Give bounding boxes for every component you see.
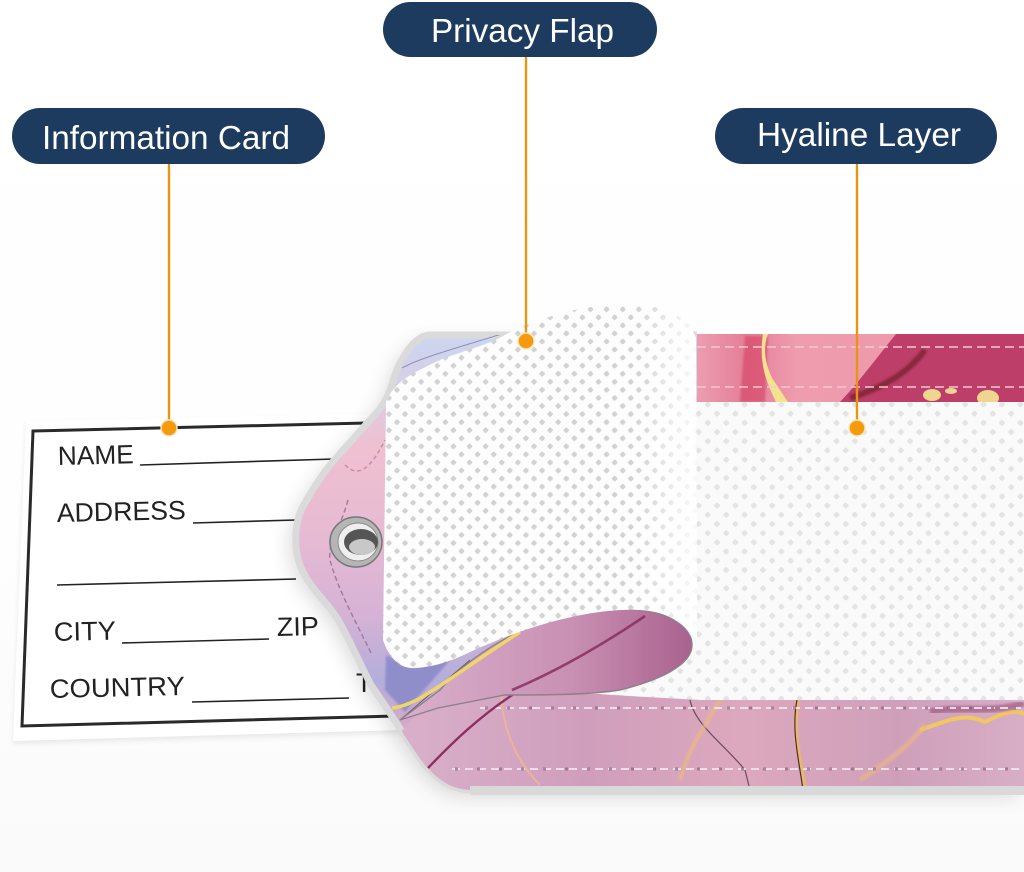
card form fields: ZIP <box>276 611 319 642</box>
hyaline window panel <box>560 402 1024 700</box>
top marble strip <box>697 334 1024 406</box>
label: Information Card <box>12 108 325 164</box>
white edge above top strip <box>697 324 1024 334</box>
marble left panel detail <box>330 333 505 712</box>
callout line: Information Card <box>161 164 177 436</box>
luggage tag body <box>290 304 1024 796</box>
label: Hyaline Layer: Hyaline Layer <box>757 116 961 153</box>
bottom grey edge <box>470 786 1024 795</box>
card form fields: CITY <box>53 616 116 647</box>
label: Hyaline Layer <box>715 108 997 164</box>
bottom marble strip <box>400 660 1024 790</box>
label: Information Card: Information Card <box>42 119 290 156</box>
label: Privacy Flap: Privacy Flap <box>431 12 614 49</box>
card border <box>22 423 396 726</box>
gold vein <box>392 632 520 708</box>
card form fields: COUNTRY <box>49 671 185 704</box>
callout line: Hyaline Layer <box>849 164 865 436</box>
eyelet <box>330 517 382 567</box>
card form fields: ADDRESS <box>56 495 186 528</box>
card form fields: T <box>356 668 372 698</box>
privacy flap <box>383 304 697 668</box>
callout line: Privacy Flap <box>518 57 534 349</box>
information card <box>13 414 402 744</box>
underside crease <box>512 616 645 690</box>
label: Privacy Flap <box>383 2 657 57</box>
card form fields: NAME <box>57 439 134 471</box>
flap underside <box>400 609 692 720</box>
card form fields <box>49 439 372 704</box>
